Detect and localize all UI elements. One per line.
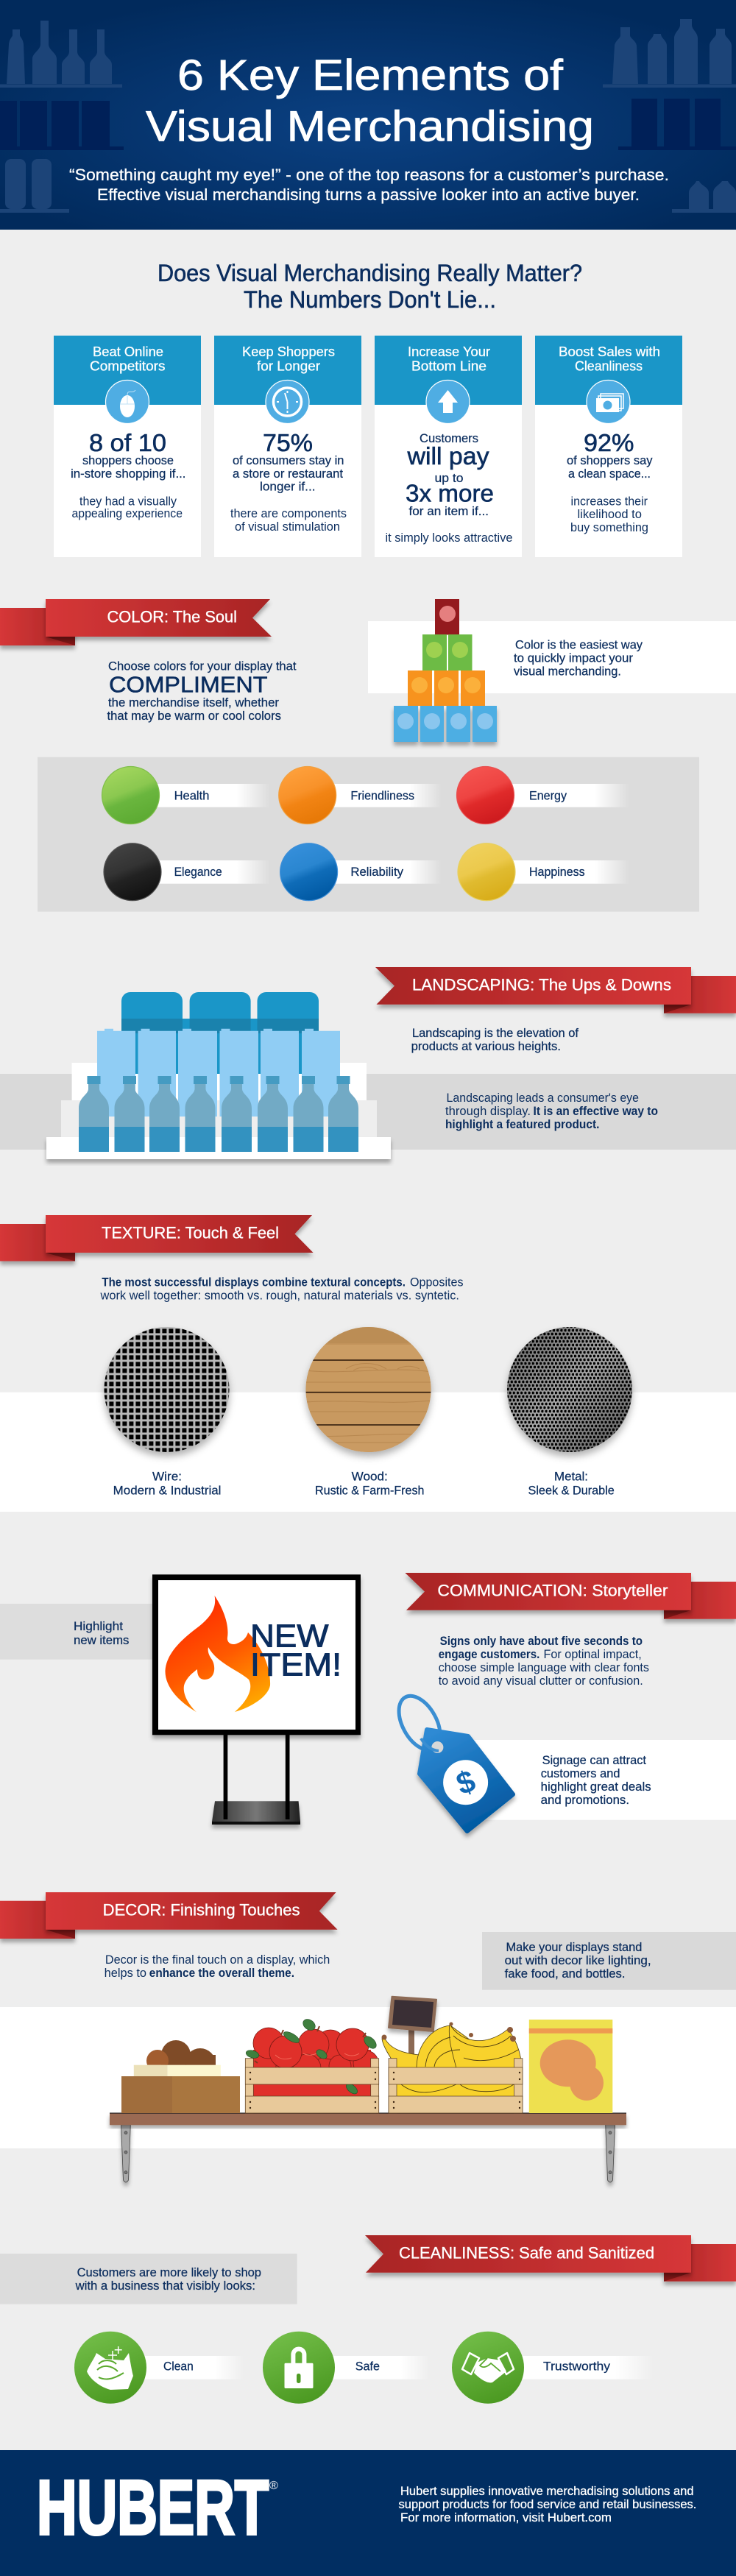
panel: stat card 3: Increase Your xyxy=(408,344,490,359)
callout: signage: customers and xyxy=(541,1767,620,1780)
ribbon: cleanliness: CLEANLINESS: Safe and Sanitized xyxy=(399,2244,654,2262)
icon: flame xyxy=(165,1596,270,1716)
panel: stat card 4 xyxy=(535,336,682,557)
panel: stat card 1: Beat Online xyxy=(93,344,163,359)
brown box with rolls xyxy=(121,2040,240,2113)
cereal box xyxy=(529,2020,612,2113)
panel: stat card 1: in-store shopping if... xyxy=(71,467,185,481)
item: safe: Safe xyxy=(355,2360,380,2374)
text: decor intro: Decor is the final touch on a display, which xyxy=(105,1953,330,1967)
callout: signage: highlight great deals xyxy=(541,1780,651,1794)
footer text xyxy=(399,2485,696,2524)
panel: stat card 2: for Longer xyxy=(257,359,320,374)
panel: stat card 4: increases their xyxy=(571,495,648,508)
color tag: happiness: Happiness xyxy=(529,866,585,879)
text: choose colors: COMPLIMENT xyxy=(109,672,268,698)
panel: stat card 1 xyxy=(54,336,201,557)
color tag: friendliness: Friendliness xyxy=(350,790,414,803)
ribbon: color: COLOR: The Soul xyxy=(107,608,237,626)
panel: stat card 3 xyxy=(375,336,522,557)
ribbon: decor xyxy=(0,1892,337,1939)
ribbon: color xyxy=(0,599,272,645)
illustration: decorated shelf xyxy=(110,1997,626,2182)
text: texture intro xyxy=(100,1276,464,1303)
text: signs: Signs only have about five seconds to xyxy=(440,1635,643,1648)
texture: metal: Sleek & Durable xyxy=(528,1485,615,1498)
section heading: numbers: Does Visual Merchandising Really Matter? xyxy=(158,260,582,286)
section heading: numbers: The Numbers Don't Lie... xyxy=(244,286,496,313)
panel: stat card 2: of visual stimulation xyxy=(235,520,340,534)
ribbon: decor: DECOR: Finishing Touches xyxy=(103,1901,300,1919)
band: texture white xyxy=(0,1393,736,1512)
panel: stat card 4: likelihood to xyxy=(577,507,642,521)
callout: customers likely to shop: with a business that visibly looks: xyxy=(75,2279,255,2293)
texture: wood xyxy=(305,1327,431,1498)
ribbon: communication xyxy=(405,1573,736,1619)
panel: stat card 2: there are components xyxy=(230,506,347,520)
footer text: For more information, visit Hubert.com xyxy=(400,2511,612,2524)
banana crate xyxy=(381,2023,523,2113)
text: texture intro: The most successful displays combine textural concepts. xyxy=(102,1276,406,1289)
texture: wire xyxy=(105,1327,230,1498)
item: clean: Clean xyxy=(163,2360,194,2374)
icon: mouse xyxy=(106,380,149,424)
sign text: NEW xyxy=(250,1618,329,1654)
panel: stat card 4: 92% xyxy=(584,429,634,456)
callout: highlight new items: Highlight xyxy=(74,1620,123,1633)
color tag: health xyxy=(102,767,270,824)
footer text: Hubert supplies innovative merchadising solutions and xyxy=(400,2485,694,2498)
item: safe xyxy=(263,2332,430,2404)
icon: money xyxy=(587,380,630,424)
color tag: energy xyxy=(456,767,629,824)
color tag: health: Health xyxy=(174,790,209,803)
callout: highlight new items: new items xyxy=(74,1634,129,1647)
text: choose colors: Choose colors for your display that xyxy=(108,660,297,673)
color tag: reliability: Reliability xyxy=(350,866,404,879)
callout: decor tip: Make your displays stand xyxy=(506,1941,642,1954)
icon: up arrow xyxy=(426,380,470,424)
panel: stat card 4: Boost Sales with xyxy=(559,344,660,359)
callout: decor tip: fake food, and bottles. xyxy=(505,1967,626,1981)
text: decor intro: helps to xyxy=(105,1967,146,1980)
ribbon: texture xyxy=(0,1215,314,1262)
texture: metal: Metal: xyxy=(554,1471,588,1484)
icon: price tag: $ xyxy=(452,1763,480,1802)
title xyxy=(146,52,594,150)
section heading: numbers xyxy=(158,260,582,313)
panel: stat card 3: Bottom Line xyxy=(411,359,486,374)
text: signs: For optinal impact, xyxy=(543,1648,642,1661)
text: signs: to avoid any visual clutter or confusion. xyxy=(439,1674,643,1688)
band: landscaping callout: through display. xyxy=(445,1105,531,1118)
icon: clock xyxy=(266,380,309,424)
texture: wire: Modern & Industrial xyxy=(113,1485,221,1498)
panel: stat card 1: 8 of 10 xyxy=(89,429,166,456)
apple crate xyxy=(245,2017,379,2113)
text: choose colors xyxy=(107,660,297,723)
panel: stat card 2: longer if... xyxy=(260,480,315,493)
color tag: energy: Energy xyxy=(529,790,567,803)
text: signs: engage customers. xyxy=(439,1648,539,1661)
panel: stat card 4: a clean space... xyxy=(568,467,651,481)
color tag: elegance: Elegance xyxy=(174,866,222,879)
ribbon: texture: TEXTURE: Touch & Feel xyxy=(102,1224,279,1242)
item: trustworthy: Trustworthy xyxy=(543,2360,611,2374)
text: signs xyxy=(439,1635,649,1688)
illustration: tiered product display xyxy=(46,992,391,1159)
ribbon: cleanliness xyxy=(365,2235,736,2282)
callout: decor tip: out with decor like lighting, xyxy=(505,1954,651,1967)
panel: stat card 1: appealing experience xyxy=(72,506,183,520)
band: decor white xyxy=(0,2007,736,2148)
ribbon: communication: COMMUNICATION: Storyteller xyxy=(437,1582,668,1600)
callout: signage: and promotions. xyxy=(541,1794,629,1807)
back row jugs xyxy=(121,992,319,1074)
chalkboard price sign xyxy=(389,1997,436,2057)
callout: color is the easiest way: Color is the easiest way xyxy=(515,639,643,652)
decorative shelves with bottles xyxy=(0,19,736,213)
callout: color is the easiest way: to quickly impact your xyxy=(514,652,634,665)
panel: stat card 2 xyxy=(214,336,361,557)
callout: highlight new items xyxy=(0,1604,152,1660)
panel: stat card 4: buy something xyxy=(570,520,648,534)
text: signs: choose simple language with clear fonts xyxy=(439,1661,649,1674)
subtitle: “Something caught my eye!” - one of the top reasons for a customer’s purchase. xyxy=(69,166,669,184)
shelf board xyxy=(110,2112,626,2125)
front row bottles xyxy=(79,1076,358,1152)
color tag: happiness xyxy=(458,843,629,901)
icon: handshake xyxy=(462,2353,514,2382)
panel: stat card 3: up to xyxy=(434,471,464,485)
footer panel xyxy=(0,2450,736,2576)
callout: customers likely to shop: Customers are more likely to shop xyxy=(77,2266,261,2279)
band: landscaping callout: Landscaping leads a consumer's eye xyxy=(446,1091,639,1105)
callout: customers likely to shop xyxy=(0,2254,297,2304)
logo: ® xyxy=(269,2480,278,2492)
text: decor intro xyxy=(105,1953,330,1980)
icon: price tag xyxy=(390,1689,513,1831)
color tag: elegance xyxy=(104,843,270,901)
texture: wood: Rustic & Farm-Fresh xyxy=(315,1485,424,1498)
display steps xyxy=(46,1063,391,1159)
title: Visual Merchandising xyxy=(146,103,594,150)
icon: wiping hand xyxy=(87,2346,133,2390)
panel: stat card 1: shoppers choose xyxy=(82,453,174,467)
icon: stacked cans pyramid xyxy=(394,599,497,742)
text: landscaping definition: products at various heights. xyxy=(411,1040,561,1053)
panel: color meanings xyxy=(38,757,699,912)
texture: wire: Wire: xyxy=(152,1471,182,1484)
title: 6 Key Elements of xyxy=(177,52,564,99)
band: landscaping callout xyxy=(0,1074,736,1150)
item: trustworthy xyxy=(452,2332,654,2404)
panel: stat card 2: Keep Shoppers xyxy=(242,344,335,359)
panel: stat card 2: a store or restaurant xyxy=(233,467,343,481)
text: texture intro: work well together: smooth vs. rough, natural materials vs. syntetic. xyxy=(100,1289,459,1303)
color tag: reliability xyxy=(280,843,442,901)
panel: stat card 3: 3x more xyxy=(406,480,494,506)
logo: HUBERT xyxy=(37,2465,269,2551)
text: decor intro: enhance the overall theme. xyxy=(149,1967,294,1980)
panel: stat card 4: of shoppers say xyxy=(567,453,653,467)
stand posts xyxy=(224,1735,290,1819)
panel: stat card 1: Competitors xyxy=(90,359,165,374)
texture: wood: Wood: xyxy=(352,1471,388,1484)
sign text: ITEM! xyxy=(250,1647,342,1683)
middle row boxes xyxy=(97,1029,340,1117)
callout: signage xyxy=(470,1740,736,1820)
callout: decor tip xyxy=(482,1932,736,1990)
stand base xyxy=(212,1801,300,1825)
callout: color is the easiest way xyxy=(368,621,736,693)
band: landscaping callout: It is an effective way to xyxy=(533,1105,658,1118)
panel: stat card 3: Customers xyxy=(420,431,478,445)
sign text xyxy=(250,1618,342,1683)
subtitle xyxy=(69,166,669,204)
texture: metal xyxy=(507,1327,632,1498)
panel: stat card 3: for an item if... xyxy=(409,504,489,518)
sign frame xyxy=(152,1574,361,1735)
item: clean xyxy=(74,2332,244,2404)
subtitle: Effective visual merchandising turns a passive looker into an active buyer. xyxy=(97,185,640,204)
panel: stat card 1: they had a visually xyxy=(79,495,177,508)
text: landscaping definition: Landscaping is the elevation of xyxy=(412,1027,578,1040)
panel: stat card 4: Cleanliness xyxy=(575,359,643,374)
ribbon: landscaping xyxy=(375,967,736,1013)
text: choose colors: the merchandise itself, whether xyxy=(108,696,280,710)
band: landscaping callout: highlight a featured product. xyxy=(445,1118,599,1131)
panel: stat card 2: of consumers stay in xyxy=(233,453,344,467)
text: landscaping definition xyxy=(411,1027,578,1053)
text: texture intro: Opposites xyxy=(410,1276,464,1289)
header panel xyxy=(0,0,736,230)
callout: color is the easiest way: visual merchanding. xyxy=(514,665,621,679)
color tag: friendliness xyxy=(279,767,442,824)
icon: padlock xyxy=(284,2347,314,2388)
ribbon: landscaping: LANDSCAPING: The Ups & Downs xyxy=(412,976,671,994)
text: choose colors: that may be warm or cool colors xyxy=(107,710,281,723)
callout: signage: Signage can attract xyxy=(542,1754,646,1767)
panel: stat card 3: it simply looks attractive xyxy=(386,531,512,545)
panel: stat card 2: 75% xyxy=(263,429,313,456)
illustration: sign on stand xyxy=(152,1574,361,1825)
footer text: support products for food service and retail businesses. xyxy=(399,2498,696,2511)
shelf brackets xyxy=(121,2125,615,2182)
panel: stat card 3: will pay xyxy=(406,442,489,470)
